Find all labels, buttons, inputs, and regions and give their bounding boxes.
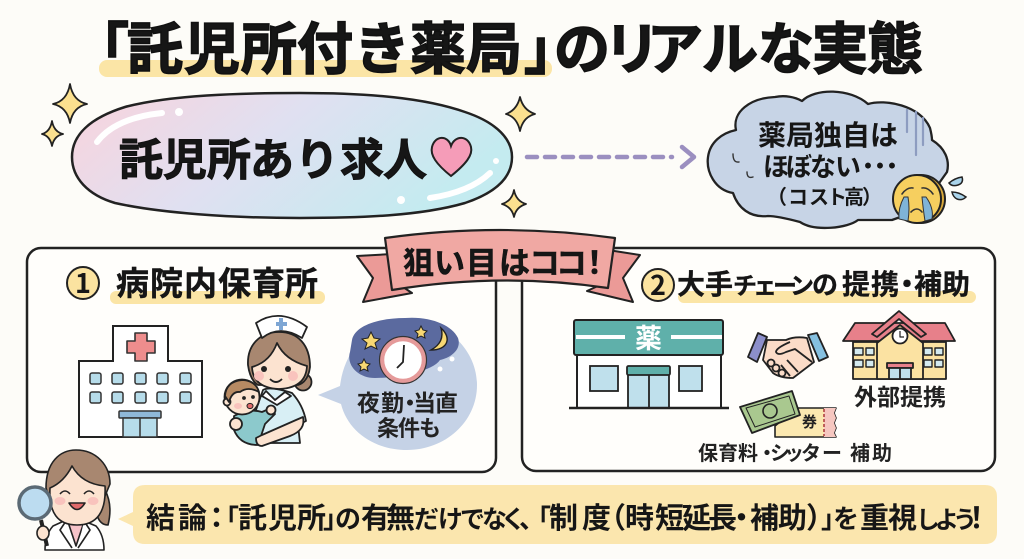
heading: 大手チェーンの提携・補助: チェーン [733,266,814,301]
icon: pharmacy [569,317,729,408]
callout: night shift speech bubble: 夜勤・当直 [357,384,458,418]
cloud callout: … [862,138,898,190]
callout: night shift speech bubble [318,318,477,450]
icon: crying coin [893,175,966,223]
cloud callout: （コスト高） [767,181,882,210]
conclusion bar: 「 [213,499,239,536]
pill: 託児所あり求人 [72,93,512,218]
icon: banknote and ticket [740,391,836,437]
pill: 託児所あり求人: 託児所あり求人 [119,124,427,188]
dashed arrow [527,147,694,167]
icon: hospital [79,326,202,437]
icon: pharmacy: 薬 [635,317,662,356]
conclusion bar: 、 [519,499,545,536]
conclusion bar: 有無 [361,495,415,537]
heading: 大手チェーンの提携・補助: 提携・補助 [842,263,970,303]
icon: handshake [748,333,828,378]
conclusion bar: 重視 [860,495,917,537]
conclusion bar: 」 [821,499,847,536]
ribbon banner: 狙い目はココ！: 狙い目はココ！ [403,238,610,283]
icon: partner school [843,311,955,379]
heading: 大手チェーンの提携・補助: 2 [650,264,666,303]
title: 「託児所付き薬局」のリアルな実態 [73,5,923,86]
conclusion bar: ！ [962,495,991,537]
conclusion bar: しよう [916,500,977,535]
conclusion bar: 結論： [146,495,231,537]
conclusion bar [118,485,997,544]
label: 外部提携: 外部提携 [854,378,946,412]
cloud callout: 薬局独自は [758,114,898,154]
conclusion bar: 」 [323,499,349,536]
conclusion bar: 託児所 [238,495,326,537]
cloud callout [708,92,966,228]
sparkles around pill [42,84,535,217]
ribbon banner: 狙い目はココ！ [357,230,640,302]
heading: 大手チェーンの提携・補助: の [812,265,838,302]
cloud callout: ほぼない [763,147,861,184]
icon: night sky cloud [349,318,459,378]
conclusion bar: だけでなく [414,500,526,536]
conclusion bar: 制度（時短延長・補助） [549,495,835,537]
heading: 大手チェーンの提携・補助 [642,263,976,303]
conclusion bar: の [335,499,361,536]
panel: chain support [522,248,995,471]
conclusion bar: を [833,499,859,536]
callout: night shift speech bubble: 条件も [377,411,441,443]
icon: nurse holding baby [224,316,312,446]
panel: hospital nursery [27,248,496,472]
ticket label: 券 [802,411,817,432]
icon: heart [432,138,471,176]
label: 保育料・シッター補助: 保育料・シッター補助 [698,437,892,466]
heading: 病院内保育所: 1 [75,262,91,301]
heading: 大手チェーンの提携・補助: 大手 [677,263,733,303]
heading: 病院内保育所: 病院内保育所 [116,257,318,305]
character: woman with magnifier [19,450,110,550]
conclusion bar: 「 [525,499,551,536]
